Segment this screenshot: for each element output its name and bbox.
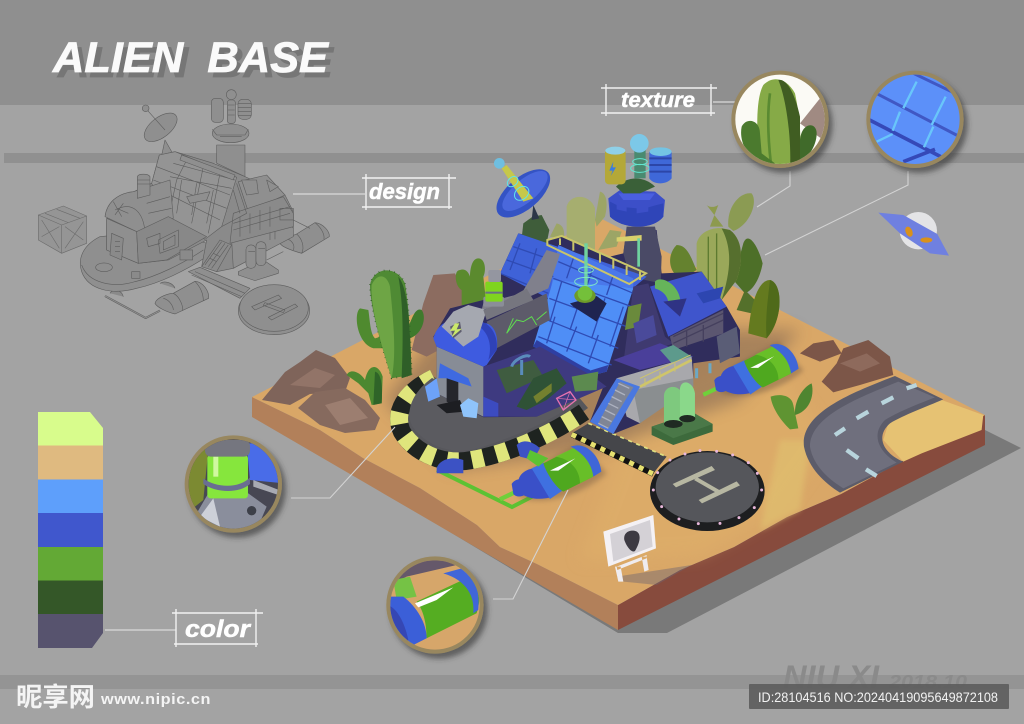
- lower roof slope: [482, 243, 633, 376]
- roof railing: [547, 236, 646, 284]
- watermark: image id: ID:28104516 NO:20240419095649872108: [758, 689, 998, 705]
- alien face icon: [624, 531, 640, 551]
- diorama: terrain ground: [250, 218, 1021, 633]
- alien base building: [425, 134, 740, 445]
- left tall cactus: [357, 270, 424, 378]
- label: design: design: [369, 179, 440, 204]
- title: ALIEN BASE: [52, 34, 329, 82]
- building silhouette: [107, 152, 293, 272]
- lower right block: [232, 218, 293, 268]
- watermark: site: www.nipic.cn: [100, 691, 211, 708]
- rock behind left cactus: [412, 273, 473, 357]
- helipad lights: [652, 449, 763, 525]
- icon: flying saucer: [878, 212, 949, 256]
- base platform: [80, 230, 217, 291]
- tower: [608, 190, 665, 283]
- small cactus right: [771, 383, 812, 429]
- terrain left face: [252, 397, 618, 630]
- label: design: [362, 174, 456, 210]
- author signature: 2018.10: [888, 672, 967, 692]
- cactus behind roof: [456, 258, 487, 307]
- right big cactus: [670, 193, 780, 338]
- detail circle: green tube: [386, 556, 487, 657]
- alien sign board: [603, 515, 692, 585]
- green pipe on ground: [437, 470, 545, 507]
- stair platform and pipes: [590, 355, 713, 445]
- helipad walkway: [572, 423, 667, 474]
- helipad sketch: [188, 267, 310, 335]
- building silhouette underlay: [433, 230, 740, 434]
- glass tank front: [500, 443, 607, 501]
- watermark: site: 昵享网: [16, 677, 95, 714]
- title: ALIEN BASE: [57, 39, 334, 87]
- terrain sand surface: [252, 218, 985, 605]
- faded back cactus: [567, 197, 595, 250]
- small blue pipe connector: [437, 441, 548, 473]
- detail circle: roof tile texture: [865, 70, 965, 170]
- leader lines to circles: [291, 171, 908, 599]
- horizontal stripe: [4, 153, 1024, 163]
- back cacti and rock: [347, 192, 780, 405]
- helipad: [650, 449, 765, 531]
- rocks right: [800, 340, 893, 392]
- left block: [105, 180, 173, 232]
- roof section below railing: [550, 245, 633, 293]
- footer band: [0, 675, 1024, 689]
- detail circle: green bottle: [185, 435, 285, 535]
- tower top devices: [605, 134, 672, 193]
- hazard-striped circular pad: [398, 375, 588, 463]
- label: texture: [601, 84, 717, 116]
- road: [804, 376, 983, 493]
- watermark: image id: [749, 684, 1009, 709]
- label: color: color: [185, 616, 252, 643]
- label: texture: texture: [621, 89, 695, 112]
- left block with curved roof: [425, 288, 550, 418]
- icon: wireframe crate: [38, 206, 87, 253]
- main roof: [152, 152, 237, 239]
- purple lower wall: [483, 343, 693, 417]
- terrain cast shadow: [250, 412, 1021, 633]
- tank sketches: [105, 220, 329, 318]
- upper roof slope: [500, 233, 647, 298]
- watermark: site: [16, 677, 211, 714]
- small cactus left: [347, 367, 383, 405]
- dish antenna: [488, 158, 558, 243]
- right wing: [623, 272, 740, 363]
- rocks left: [262, 350, 380, 433]
- building sketch: [80, 152, 293, 291]
- wireframe design sketch of the base: [38, 90, 329, 335]
- leader lines: [105, 102, 735, 630]
- author signature: [783, 659, 967, 695]
- roof aerial: [570, 238, 640, 322]
- dish and tower sketch: [139, 90, 251, 177]
- label: color: [172, 609, 263, 647]
- header band: [0, 0, 1024, 105]
- detail circle: cactus texture: [730, 70, 833, 170]
- glass tank right: [703, 342, 804, 396]
- right wing: [238, 175, 285, 212]
- green bottle chimney: [483, 270, 504, 307]
- helipad H mark: [673, 466, 740, 503]
- colour palette: [38, 412, 103, 648]
- terrain right face: [618, 415, 985, 630]
- author signature: NIU XI: [783, 659, 880, 695]
